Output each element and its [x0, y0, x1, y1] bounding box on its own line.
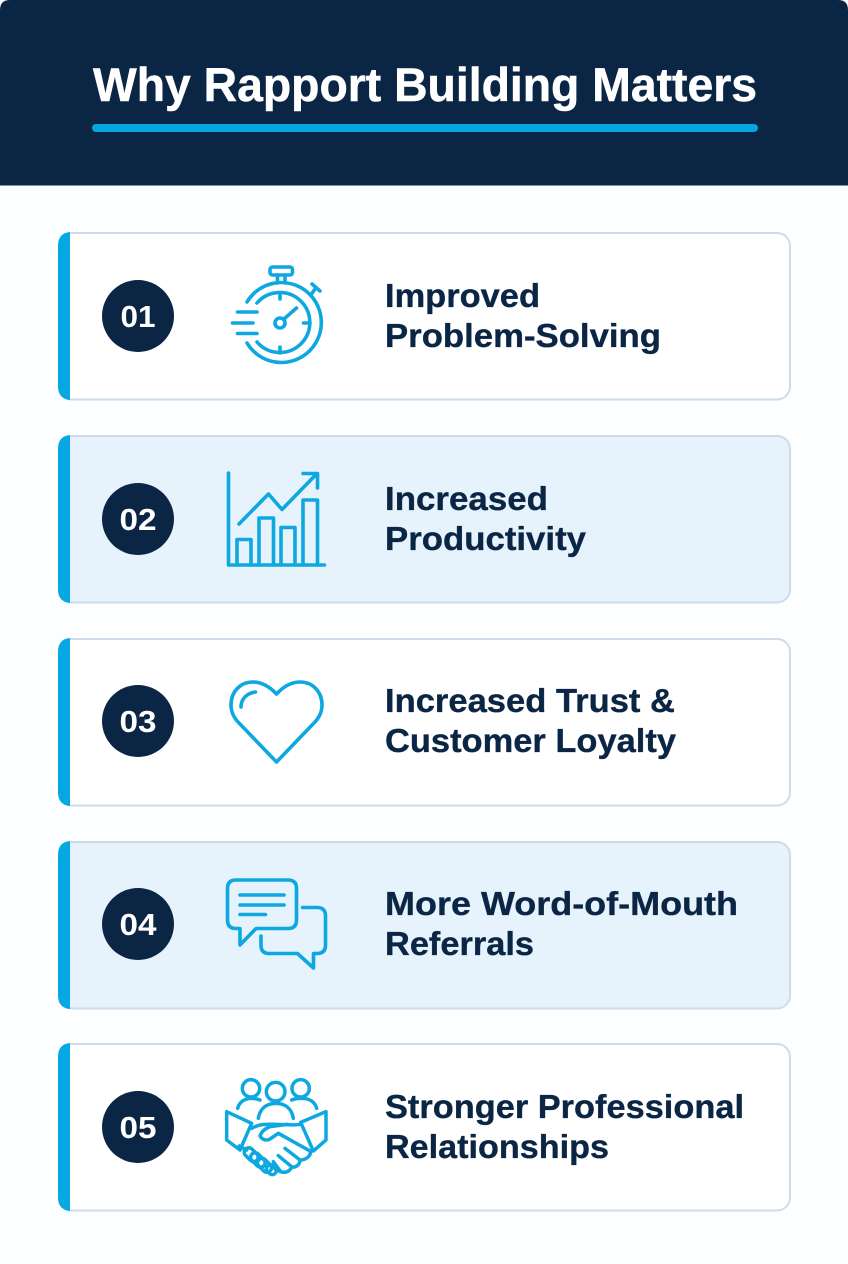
icon: chat bubbles [228, 880, 326, 968]
label: Problem-Solving [385, 318, 661, 355]
label: Increased Trust & [385, 683, 675, 720]
number badge 04: 04 [120, 907, 157, 942]
number badge 02 [102, 483, 174, 555]
panel: item 4 [58, 841, 790, 1009]
label: Stronger Professional [385, 1089, 744, 1126]
label [385, 886, 738, 963]
icon: team handshake [227, 1080, 326, 1176]
number badge 02: 02 [120, 502, 156, 537]
header banner [0, 0, 848, 186]
label: Customer Loyalty [385, 723, 676, 760]
label: Productivity [385, 521, 586, 558]
label [385, 481, 586, 558]
number badge 05 [102, 1091, 174, 1163]
number badge 01 [102, 280, 174, 352]
label: Improved [385, 278, 540, 315]
title underline [92, 124, 758, 132]
number badge 01: 01 [120, 299, 156, 334]
number badge 05: 05 [120, 1110, 156, 1145]
number badge 04 [102, 888, 174, 960]
label: Increased [385, 481, 548, 518]
label: More Word-of-Mouth [385, 886, 738, 923]
panel: item 3 [58, 638, 790, 806]
panel: item 5 [58, 1043, 790, 1211]
number badge 03: 03 [120, 704, 156, 739]
label [385, 1089, 744, 1166]
title: Why Rapport Building Matters [93, 58, 757, 111]
panel: item 2 [58, 435, 790, 603]
icon: heart [231, 682, 322, 762]
number badge 03 [102, 685, 174, 757]
panel: item 1 [58, 232, 790, 400]
label [385, 683, 676, 760]
label [385, 278, 661, 355]
label: Referrals [385, 926, 534, 963]
icon: growth chart [228, 473, 324, 565]
icon: stopwatch [232, 267, 321, 362]
label: Relationships [385, 1129, 609, 1166]
